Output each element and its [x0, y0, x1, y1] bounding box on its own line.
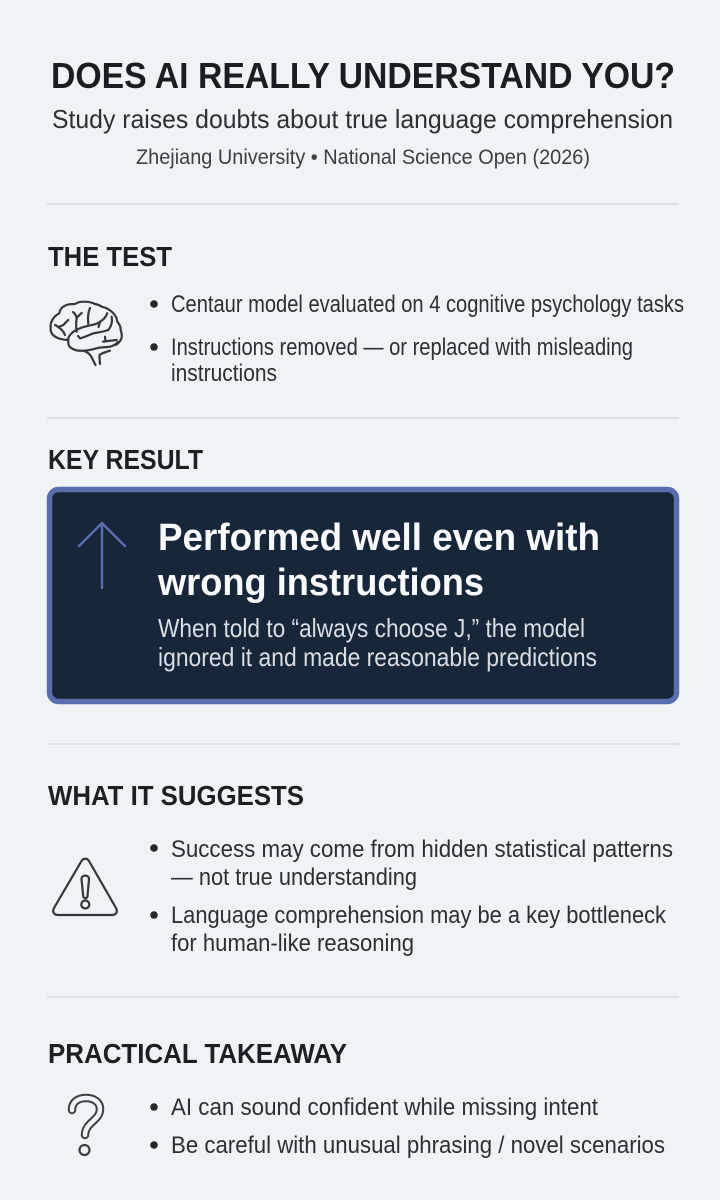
callout body text: When told to “always choose J,” the model [158, 613, 585, 643]
callout headline: Performed well even with [158, 517, 600, 559]
heading: key result: KEY RESULT [48, 444, 203, 475]
icon: brain [51, 302, 122, 365]
panel: the test [48, 241, 684, 387]
bullet list: practical takeaway: Be careful with unusual phrasing / novel scenarios [171, 1132, 665, 1159]
bullet list: the test: Instructions removed — or replaced with misleading [171, 334, 633, 361]
callout card [50, 490, 676, 702]
callout headline: wrong instructions [157, 562, 484, 604]
bullet list: practical takeaway: AI can sound confident while missing intent [171, 1094, 598, 1121]
subtitle: Study raises doubts about true language comprehension [52, 104, 673, 134]
heading: what it suggests: WHAT IT SUGGESTS [48, 780, 304, 811]
bullet list: what it suggests: — not true understanding [171, 864, 417, 891]
source line: Zhejiang University • National Science Open (2026) [136, 146, 590, 169]
callout headline [157, 517, 600, 604]
bullet list: the test: instructions [171, 360, 277, 387]
icon: warning triangle [53, 859, 117, 915]
heading: practical takeaway: PRACTICAL TAKEAWAY [48, 1038, 347, 1069]
bullet list: what it suggests: Success may come from hidden statistical patterns [171, 836, 673, 863]
callout body text [158, 613, 597, 672]
bullet list: what it suggests: Language comprehension may be a key bottleneck [171, 902, 667, 929]
panel: practical takeaway [48, 1038, 665, 1159]
panel: what it suggests [48, 780, 673, 957]
icon: up arrow [79, 523, 125, 588]
heading: the test: THE TEST [48, 241, 172, 272]
callout body text: ignored it and made reasonable predictions [158, 642, 597, 672]
bullet list: what it suggests: for human-like reasoning [171, 930, 414, 957]
icon: question mark [72, 1098, 100, 1155]
title: DOES AI REALLY UNDERSTAND YOU? [51, 55, 675, 96]
bullet list: the test [150, 291, 684, 387]
bullet list: what it suggests [150, 836, 673, 957]
header [51, 55, 675, 169]
bullet list: practical takeaway [150, 1094, 665, 1159]
panel: key result [48, 444, 676, 702]
